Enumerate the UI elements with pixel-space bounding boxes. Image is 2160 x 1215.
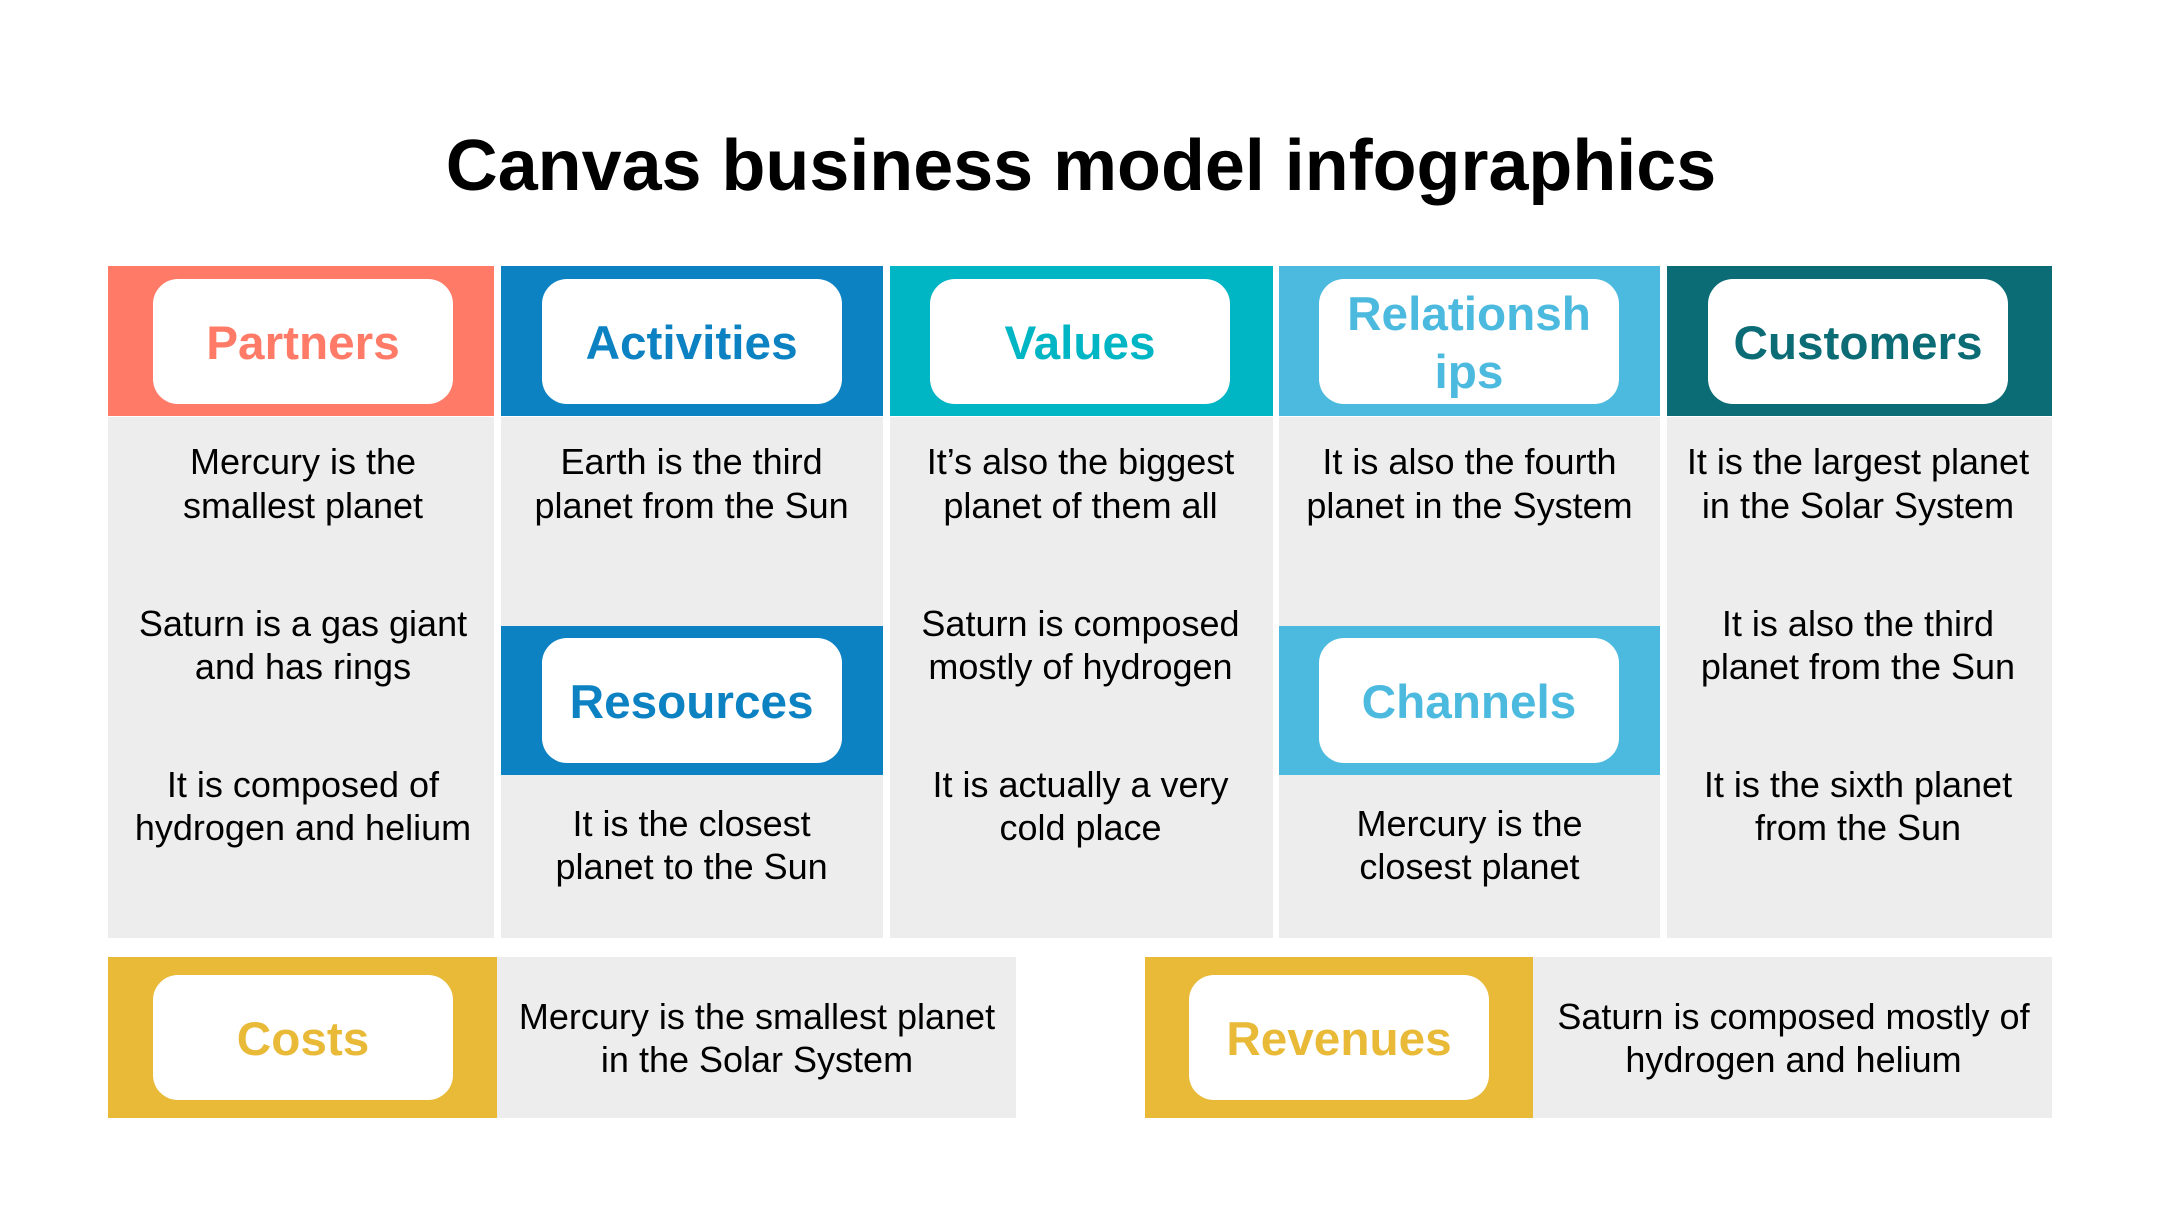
panel: customers	[1667, 266, 2052, 938]
customers text 2	[1701, 603, 2015, 687]
costs header	[108, 957, 497, 1118]
panel: relationships and channels	[1279, 266, 1660, 938]
revenues label: Revenues	[1226, 1013, 1452, 1066]
customers text 1: in the Solar System	[1702, 485, 2014, 526]
relationships text	[1306, 441, 1633, 526]
values text 2	[921, 603, 1240, 687]
panel: revenues	[1145, 957, 2052, 1118]
costs text: in the Solar System	[601, 1039, 913, 1080]
relationships label: ips	[1435, 346, 1503, 399]
costs body background	[497, 957, 1016, 1118]
partners text 1	[183, 441, 423, 526]
partners text 3	[135, 764, 471, 848]
resources label: Resources	[570, 676, 814, 729]
relationships body background	[1279, 417, 1660, 938]
relationships text: It is also the fourth	[1322, 441, 1617, 482]
customers text 3	[1704, 764, 2012, 848]
channels label: Channels	[1362, 676, 1576, 729]
customers body background	[1667, 417, 2052, 938]
partners header	[108, 266, 494, 416]
resources text	[555, 803, 828, 887]
revenues text	[1557, 996, 2030, 1080]
customers label	[1708, 279, 2008, 404]
relationships text: planet in the System	[1306, 485, 1633, 526]
values body background	[890, 417, 1273, 938]
customers label: Customers	[1733, 317, 1983, 370]
partners text 1: Mercury is the	[190, 441, 416, 482]
channels label	[1319, 638, 1619, 762]
partners text 1: smallest planet	[183, 485, 423, 526]
values text 3	[932, 764, 1229, 848]
customers text 1	[1687, 441, 2029, 526]
partners text 2	[139, 603, 467, 687]
values text 1: planet of them all	[943, 485, 1218, 526]
customers text 2: planet from the Sun	[1701, 646, 2015, 687]
partners text 2: and has rings	[195, 646, 411, 687]
values text 1: It’s also the biggest	[927, 441, 1234, 482]
relationships label: Relationsh	[1347, 288, 1591, 341]
activities label: Activities	[586, 317, 798, 370]
relationships header	[1279, 266, 1660, 416]
customers text 3: It is the sixth planet	[1704, 764, 2012, 805]
revenues text: hydrogen and helium	[1625, 1039, 1962, 1080]
channels text	[1356, 803, 1583, 887]
activities text: planet from the Sun	[534, 485, 849, 526]
partners body background	[108, 417, 494, 938]
values text 2: Saturn is composed	[921, 603, 1240, 644]
panel: costs	[108, 957, 1016, 1118]
panel: activities and resources	[501, 266, 883, 938]
values text 3: It is actually a very	[932, 764, 1229, 805]
resources text: It is the closest	[573, 803, 811, 844]
partners text 2: Saturn is a gas giant	[139, 603, 467, 644]
activities text	[534, 441, 849, 526]
values label: Values	[1004, 317, 1156, 370]
values text 1	[927, 441, 1234, 526]
panel: values	[890, 266, 1273, 938]
values text 2: mostly of hydrogen	[928, 646, 1233, 687]
resources text: planet to the Sun	[555, 846, 828, 887]
title: Canvas business model infographics	[446, 126, 1716, 206]
costs text: Mercury is the smallest planet	[519, 996, 995, 1037]
customers text 2: It is also the third	[1722, 603, 1994, 644]
activities body background	[501, 417, 883, 938]
resources label	[542, 638, 842, 762]
values header	[890, 266, 1273, 416]
customers text 1: It is the largest planet	[1687, 441, 2029, 482]
channels text: Mercury is the	[1356, 803, 1583, 844]
channels header	[1279, 626, 1660, 775]
activities header	[501, 266, 883, 416]
costs label	[153, 975, 453, 1100]
partners text 3: It is composed of	[167, 764, 439, 805]
relationships label	[1319, 279, 1619, 404]
partners label	[153, 279, 453, 404]
revenues body background	[1533, 957, 2052, 1118]
values text 3: cold place	[999, 807, 1162, 848]
channels text: closest planet	[1359, 846, 1580, 887]
resources header	[501, 626, 883, 775]
activities label	[542, 279, 842, 404]
revenues header	[1145, 957, 1533, 1118]
revenues text: Saturn is composed mostly of	[1557, 996, 2030, 1037]
panel: partners	[108, 266, 494, 938]
costs text	[519, 996, 995, 1080]
partners label: Partners	[206, 317, 400, 370]
customers text 3: from the Sun	[1755, 807, 1961, 848]
customers header	[1667, 266, 2052, 416]
revenues label	[1189, 975, 1489, 1100]
costs label: Costs	[237, 1013, 369, 1066]
activities text: Earth is the third	[561, 441, 823, 482]
values label	[930, 279, 1230, 404]
partners text 3: hydrogen and helium	[135, 807, 471, 848]
